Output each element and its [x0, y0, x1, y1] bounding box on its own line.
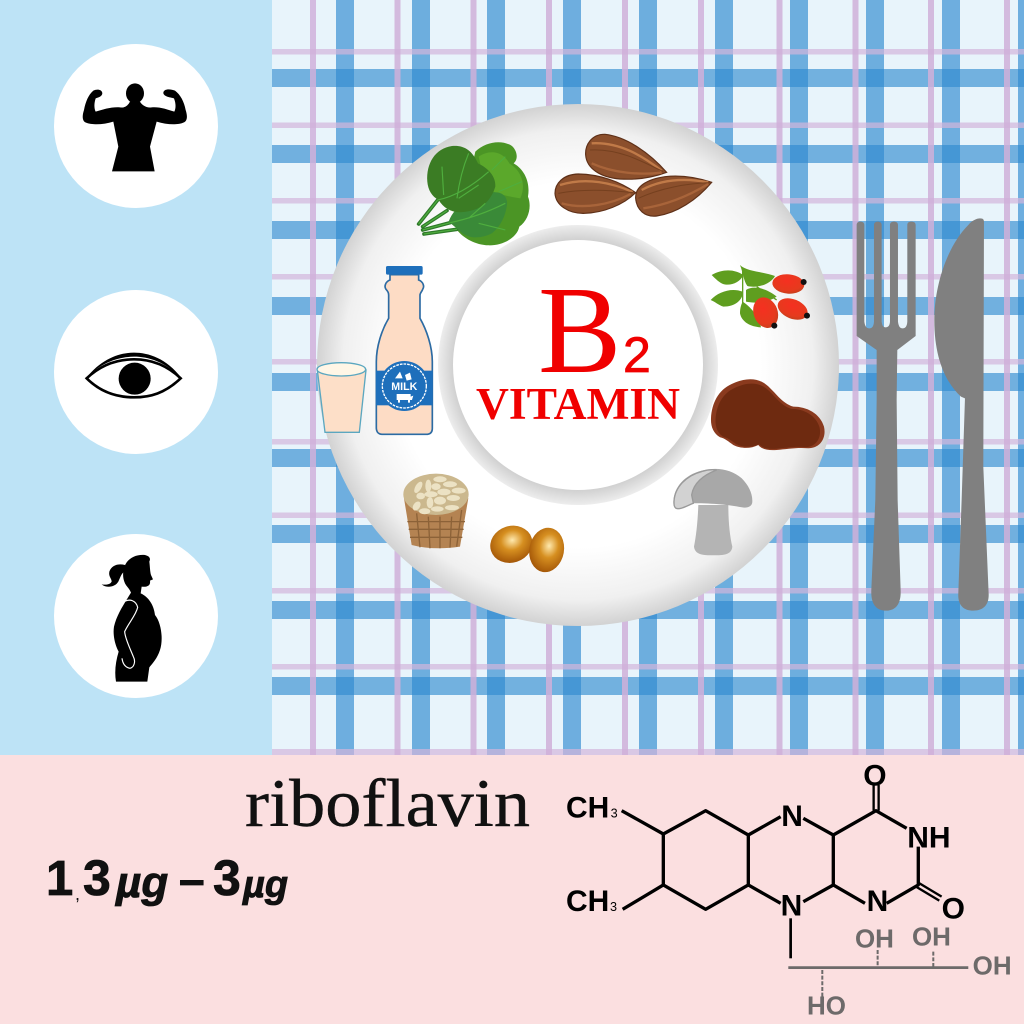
icon: spinach [419, 142, 530, 245]
icon: basket of seeds [403, 474, 469, 548]
sugar chain [788, 922, 1012, 1020]
text: dosage: , [75, 884, 80, 904]
text: dosage: µg [114, 858, 168, 907]
icon: milk bottle [376, 266, 433, 434]
panel: checked tablecloth [272, 0, 1024, 755]
molecule atom labels: CH [566, 792, 609, 825]
icon: fork [857, 222, 916, 611]
sugar chain: OH [912, 922, 951, 952]
icon: milk bottle: MILK [391, 381, 418, 393]
molecule atom labels: 3 [611, 807, 618, 821]
molecule atom labels: N [781, 890, 802, 923]
panel: left blue sidebar [0, 0, 272, 755]
text: dosage: 3 [83, 850, 111, 906]
icon: eye in circle [54, 290, 218, 454]
icon: milk glass [317, 363, 366, 432]
icon: liver [711, 379, 825, 450]
molecule bonds [622, 785, 942, 958]
icon: rose hips [711, 265, 811, 331]
plate centre [453, 240, 703, 490]
sugar chain: HO [807, 990, 846, 1020]
text: dosage: 3 [213, 850, 241, 906]
sugar chain: OH [973, 950, 1012, 980]
molecule atom labels: N [781, 800, 803, 833]
icon: knife [934, 218, 989, 611]
molecule atom labels: 3 [610, 900, 617, 914]
molecule atom labels: N [867, 885, 888, 918]
text: dosage [46, 850, 288, 907]
chemical structure of riboflavin [566, 760, 1012, 1020]
molecule atom labels [566, 760, 965, 925]
text: dosage: µg [242, 864, 288, 906]
molecule atom labels: O [942, 892, 965, 925]
panel: bottom pink band [0, 755, 1024, 1024]
plate inner ring [438, 225, 718, 505]
molecule atom labels: O [863, 760, 887, 793]
molecule atom labels: NH [907, 821, 951, 854]
sugar chain: OH [855, 923, 894, 953]
molecule atom labels: CH [566, 885, 609, 918]
plate [317, 104, 839, 626]
title: riboflavin: riboflavin [245, 765, 530, 841]
heading: VITAMIN: VITAMIN [476, 379, 680, 429]
icon: oil capsules [485, 520, 568, 575]
icon: almonds [555, 134, 712, 216]
icon: mushroom [673, 469, 752, 555]
icon: muscular man in circle [54, 44, 218, 208]
text: dosage: – [179, 853, 205, 905]
heading: B2: 2 [623, 327, 651, 383]
icon: pregnant woman in circle [54, 534, 218, 698]
text: dosage: 1 [46, 852, 73, 906]
heading: B2: B [538, 262, 621, 400]
